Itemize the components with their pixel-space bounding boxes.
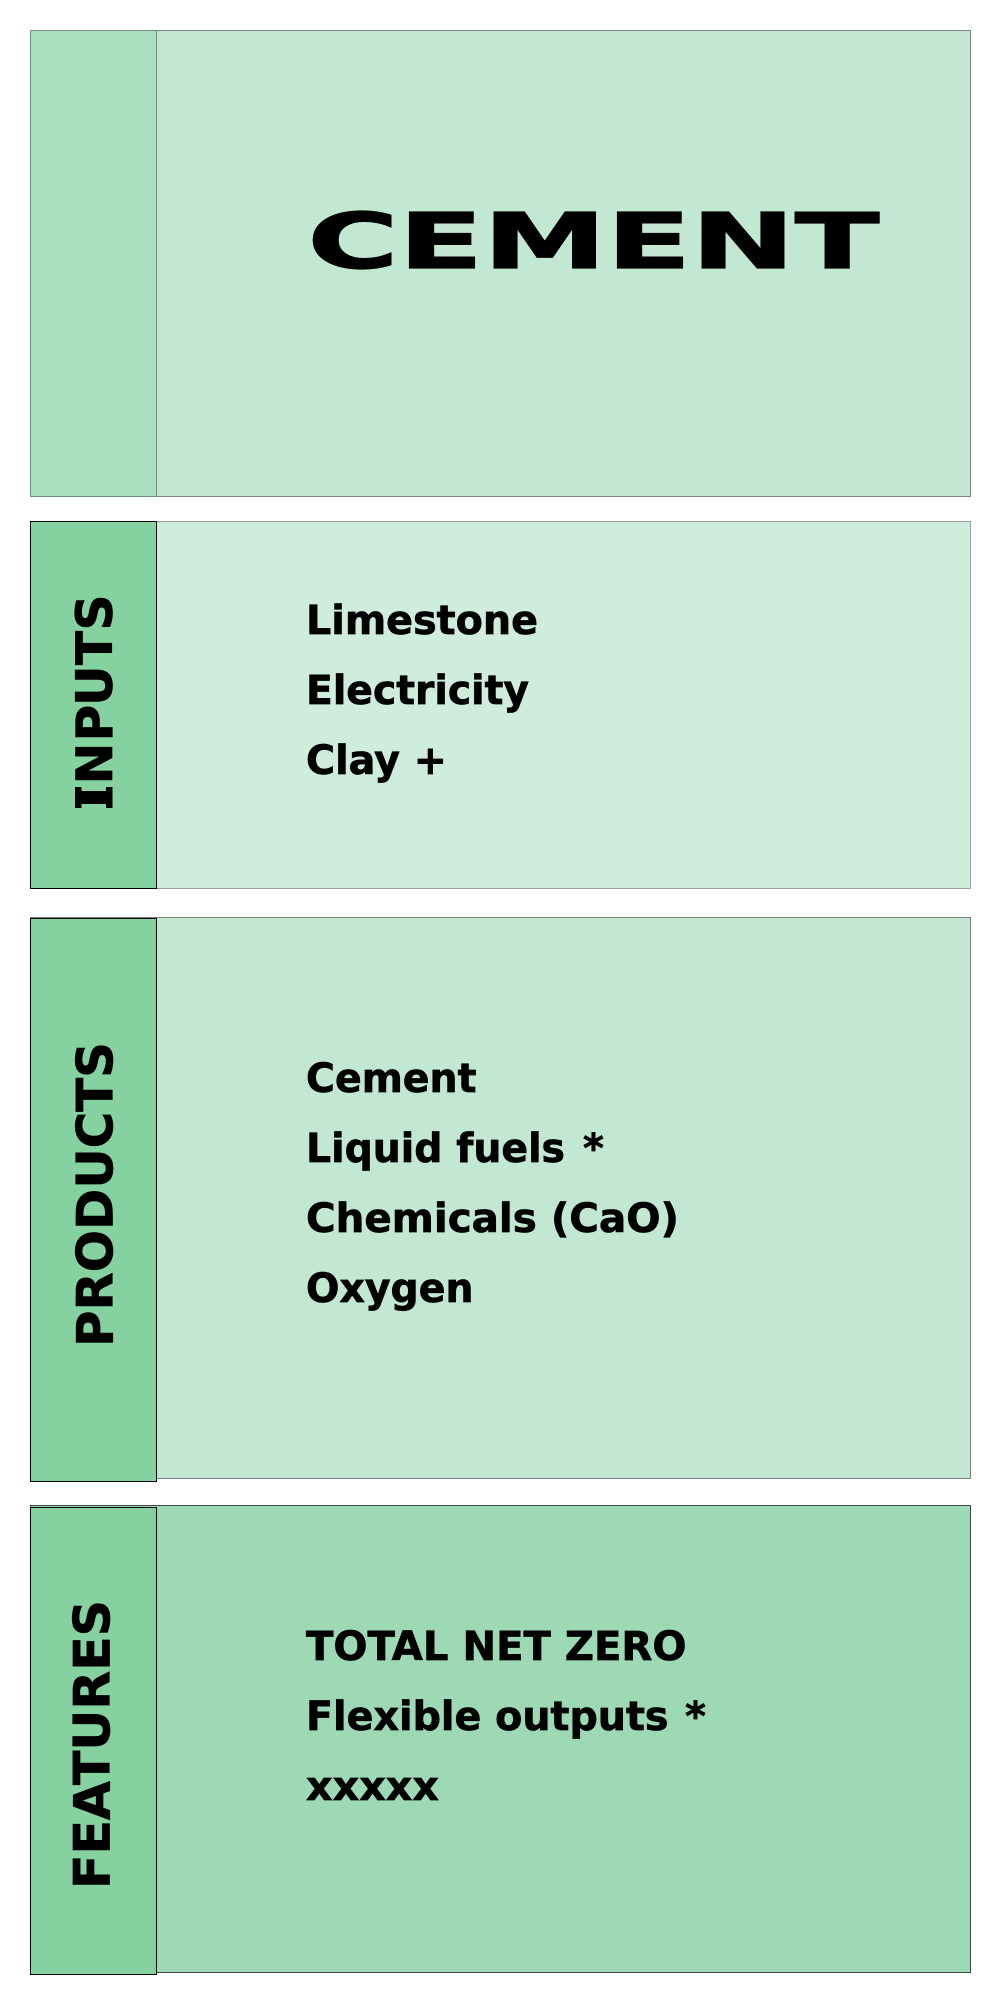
products list xyxy=(306,1056,679,1312)
features list: xxxxx xyxy=(306,1764,439,1810)
inputs list: Electricity xyxy=(306,668,529,714)
features list: * xyxy=(685,1694,706,1740)
title: CEMENT xyxy=(308,198,880,287)
features panel background xyxy=(30,1506,970,1972)
inputs heading: INPUTS xyxy=(66,594,124,807)
inputs list xyxy=(306,598,538,784)
inputs panel background xyxy=(30,522,970,888)
features list: TOTAL NET ZERO xyxy=(306,1624,686,1670)
products heading: PRODUCTS xyxy=(66,1042,124,1347)
products list: Oxygen xyxy=(306,1266,474,1312)
panel: inputs xyxy=(30,522,970,888)
products list: * xyxy=(583,1126,604,1172)
title panel background xyxy=(30,30,970,496)
panel: products xyxy=(30,918,970,1482)
products list: Chemicals (CaO) xyxy=(306,1196,679,1242)
panel: features xyxy=(30,1506,970,1974)
products list: Liquid fuels xyxy=(306,1126,565,1172)
products list: Cement xyxy=(306,1056,476,1102)
panel: title xyxy=(30,30,970,496)
inputs list: Limestone xyxy=(306,598,538,644)
features list xyxy=(306,1624,706,1810)
products side band xyxy=(30,918,156,1482)
features side band xyxy=(30,1508,156,1974)
products panel background xyxy=(30,918,970,1478)
inputs side band xyxy=(30,522,156,888)
features list: Flexible outputs xyxy=(306,1694,668,1740)
title side band xyxy=(30,30,156,496)
features heading: FEATURES xyxy=(64,1600,122,1889)
inputs list: Clay + xyxy=(306,738,447,784)
